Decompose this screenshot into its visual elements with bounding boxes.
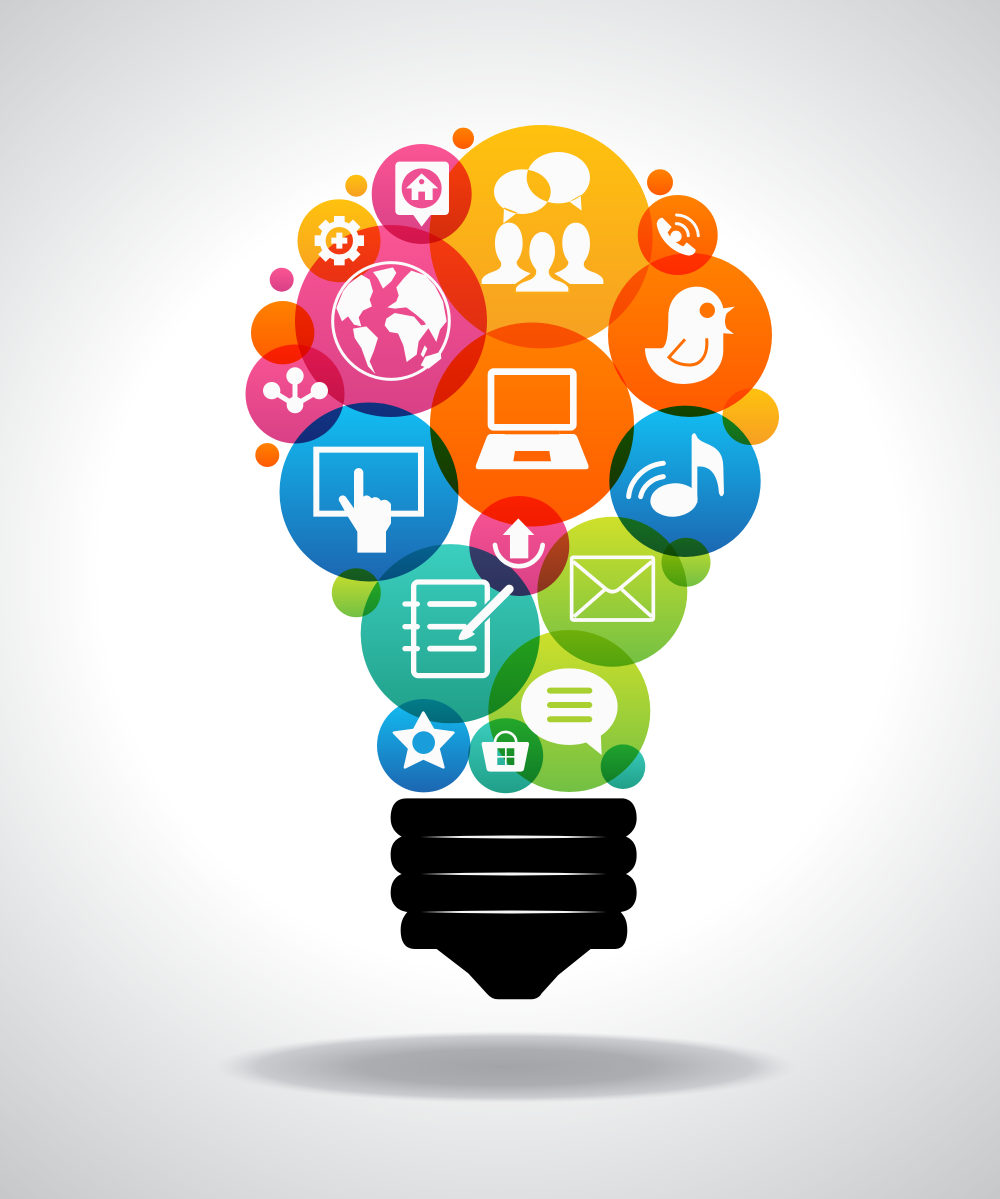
bulb circles group	[246, 125, 779, 793]
circle: small green right	[662, 538, 710, 587]
circle: pink network	[246, 344, 344, 444]
icon: bird	[645, 287, 735, 384]
icon: star	[394, 713, 453, 767]
circle: yellow gear	[298, 199, 380, 282]
ground shadow	[213, 1031, 797, 1103]
circle: orange left	[251, 301, 314, 364]
icon: tablet and hand	[316, 450, 421, 553]
icon: music note	[629, 433, 724, 519]
circle: orange phone	[638, 195, 718, 275]
icon: shopping basket	[482, 732, 529, 772]
circle: small green left	[332, 568, 381, 617]
icon: phone	[657, 215, 698, 256]
icon: network nodes	[263, 367, 328, 413]
circle: small yellow dot	[345, 175, 367, 197]
icon: globe	[333, 263, 449, 379]
circle: yellow people	[429, 125, 653, 348]
icon: laptop	[476, 372, 589, 469]
circle: small teal	[601, 744, 645, 789]
circle: blue star	[377, 699, 470, 792]
icon: three people	[482, 223, 603, 293]
icon: gear	[315, 216, 364, 265]
icon: speech bubbles	[494, 152, 590, 223]
icon: upload arrow	[495, 518, 543, 566]
circle: small pink dot	[270, 268, 294, 292]
icon: envelope	[572, 557, 653, 620]
circle: blue tablet	[280, 402, 458, 582]
circle: teal notebook	[361, 544, 540, 723]
circle: small orange dot top right	[647, 169, 673, 195]
icon: chat bubble	[521, 668, 618, 755]
circle: small orange dot bottom left	[255, 443, 279, 467]
circle: pink globe	[295, 225, 487, 417]
icon: home pin	[395, 162, 449, 227]
circle: orange bird	[608, 253, 772, 417]
circle: pink home	[372, 144, 472, 244]
bulb base: black screw socket	[391, 798, 637, 999]
circle: lime chat	[488, 630, 650, 792]
circle: blue music	[609, 406, 761, 557]
circle: orange laptop	[430, 322, 634, 526]
circle: small yellow right	[722, 388, 779, 445]
circle: pink upload	[469, 496, 569, 596]
circle: teal basket	[468, 718, 543, 793]
icon: notebook and pen	[405, 582, 509, 676]
circle: green envelope	[537, 517, 687, 667]
circle: small orange dot top	[453, 128, 474, 149]
